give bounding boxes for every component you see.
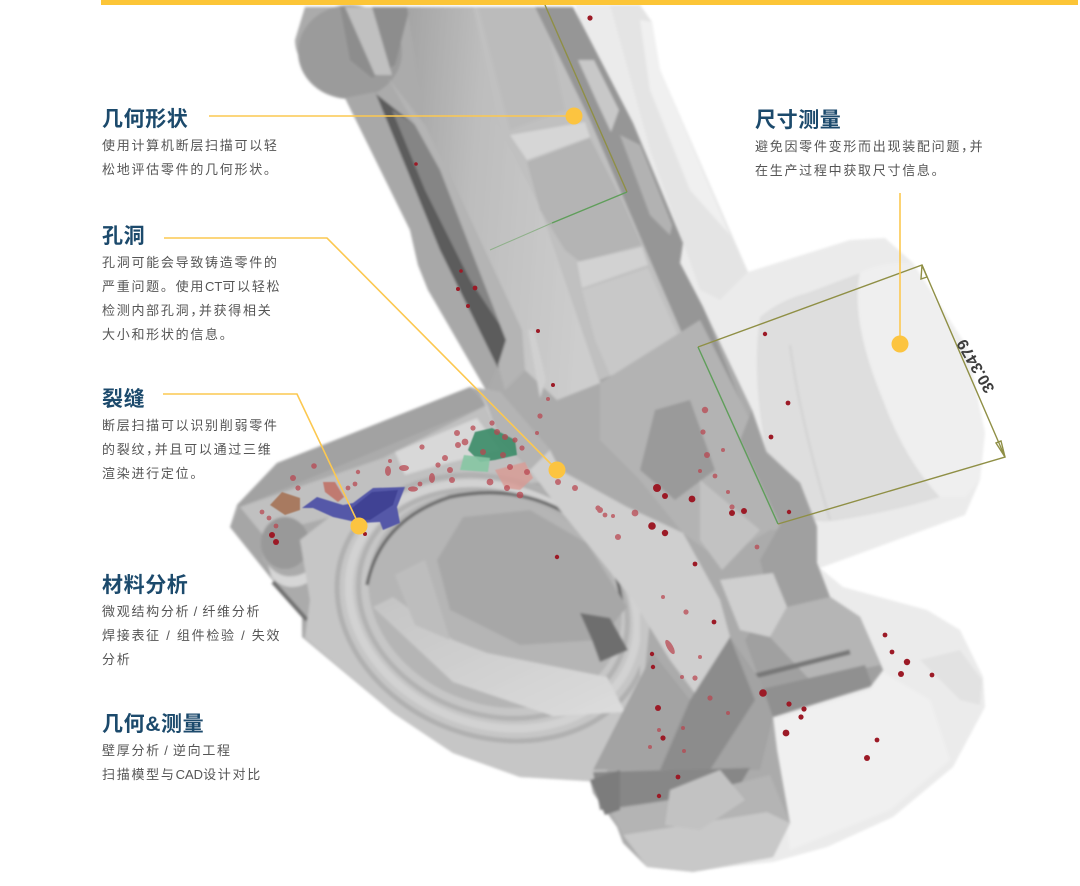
- block: dimension measurement: [755, 109, 984, 178]
- pockets region: [473, 7, 720, 400]
- block: pores: 孔洞可能会导致铸造零件的: [102, 255, 279, 270]
- measurement frame: [490, 5, 1005, 524]
- ring inner: [336, 455, 654, 745]
- defect: blue crack cluster: [302, 487, 405, 530]
- dark red pores: [269, 15, 934, 798]
- dimension label: 30.3479: [954, 336, 998, 396]
- block: pores: 严重问题。使用CT可以轻松: [102, 279, 281, 294]
- dark slot: [376, 94, 506, 368]
- leader lines: [163, 116, 900, 525]
- block: material analysis: 材料分析: [102, 574, 188, 597]
- block: geometry and measurement: [102, 712, 262, 782]
- block: cracks: 渲染进行定位。: [102, 466, 205, 481]
- leader dots: [350, 108, 908, 534]
- right rail: [535, 7, 740, 400]
- pale translucent outer body: [575, 5, 985, 870]
- lower disc: [773, 672, 950, 850]
- flange top face: [237, 387, 487, 507]
- cylinder inner: [757, 273, 940, 521]
- right dark band: [740, 410, 883, 717]
- block: geometry: [102, 108, 279, 177]
- pink pores: [260, 397, 759, 753]
- block: pores: [102, 225, 281, 342]
- block: material analysis: [102, 574, 281, 667]
- block: material analysis: 分析: [102, 652, 131, 667]
- casting illustration: [163, 5, 1006, 874]
- lower assembly: [593, 637, 773, 770]
- block: material analysis: 微观结构分析 / 纤维分析: [102, 604, 261, 619]
- knob: [298, 5, 402, 99]
- diagonal strut: [478, 388, 730, 700]
- defect: green cluster: [460, 428, 517, 472]
- block: geometry and measurement: 扫描模型与CAD设计对比: [102, 767, 262, 782]
- block: pores: 孔洞: [102, 225, 145, 248]
- block: material analysis: 焊接表征 / 组件检验 / 失效: [102, 628, 281, 643]
- block: cracks: 断层扫描可以识别削弱零件: [102, 418, 279, 433]
- flange left side: [230, 507, 305, 637]
- block: geometry: 使用计算机断层扫描可以轻: [102, 138, 279, 153]
- boss: [261, 517, 309, 569]
- ring body: [300, 490, 650, 782]
- top bar: [101, 0, 1078, 5]
- block: dimension measurement: 在生产过程中获取尺寸信息。: [755, 163, 946, 178]
- block: dimension measurement: 避免因零件变形而出现装配问题，并: [755, 139, 984, 154]
- block: geometry and measurement: 壁厚分析 / 逆向工程: [102, 743, 232, 758]
- inner rail: [388, 78, 525, 390]
- block: pores: 检测内部孔洞，并获得相关: [102, 303, 272, 318]
- rib bosses: [578, 60, 619, 132]
- block: dimension measurement: 尺寸测量: [755, 109, 841, 132]
- block: cracks: [102, 388, 279, 481]
- mid center zone: [600, 320, 817, 560]
- main arm and flange body: [230, 5, 883, 872]
- block: geometry: 几何形状: [102, 108, 188, 131]
- outer rail: [345, 92, 498, 392]
- central rail: [407, 7, 600, 400]
- block: cracks: 裂缝: [102, 388, 145, 411]
- block: geometry and measurement: 几何&测量: [102, 713, 204, 736]
- hole: [600, 373, 690, 470]
- block: geometry: 松地评估零件的几何形状。: [102, 162, 279, 177]
- block: pores: 大小和形状的信息。: [102, 327, 234, 342]
- block: cracks: 的裂纹，并且可以通过三维: [102, 442, 272, 457]
- defect: brown and pink clusters: [270, 462, 533, 515]
